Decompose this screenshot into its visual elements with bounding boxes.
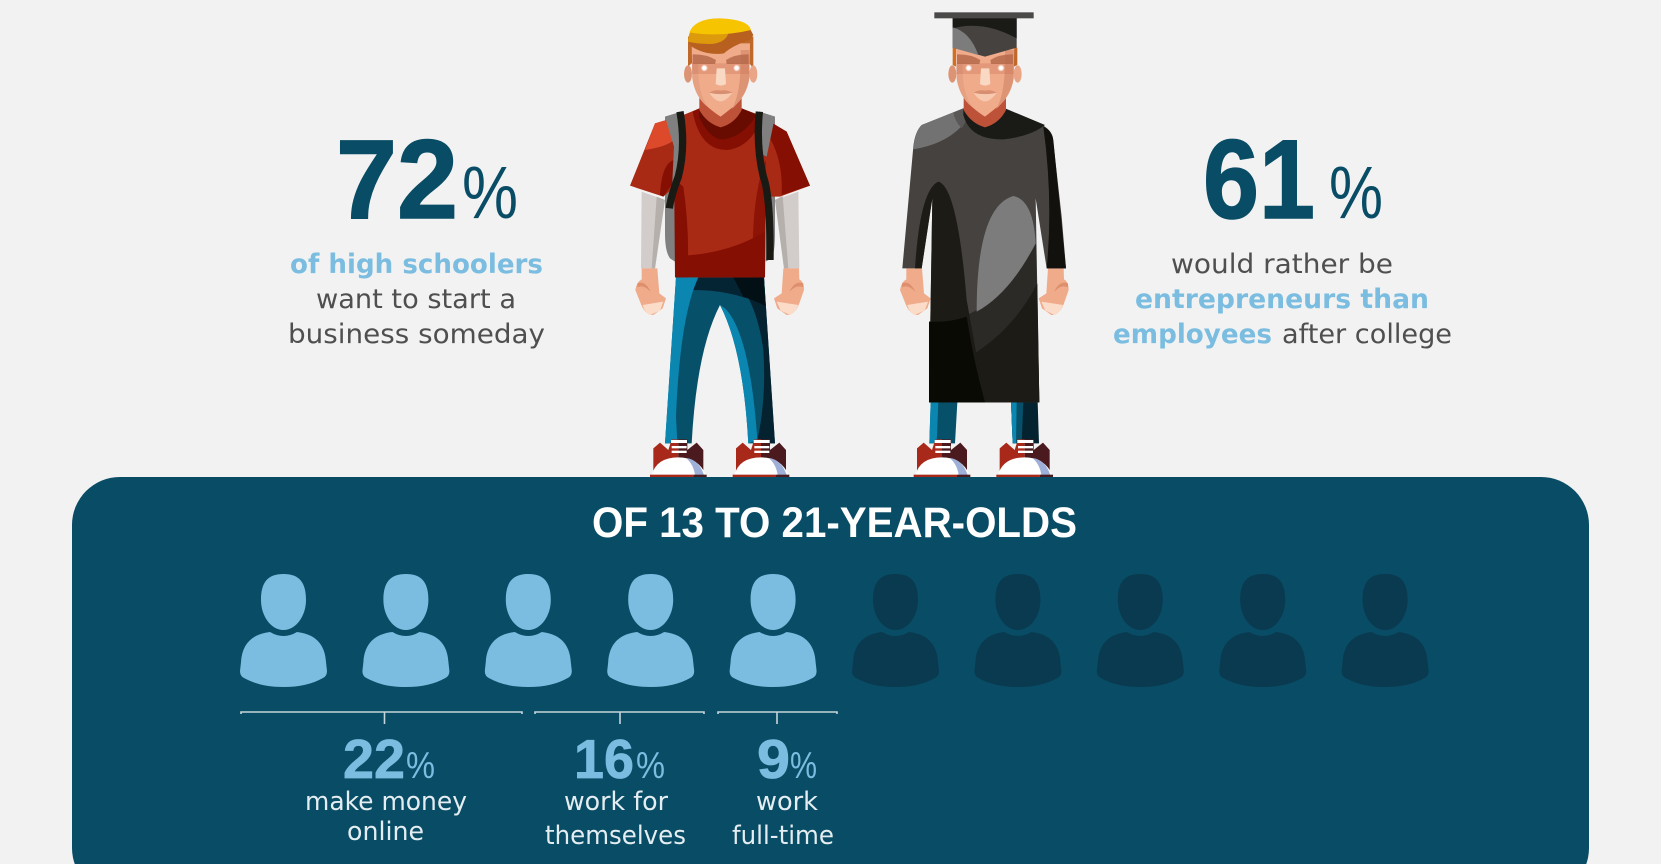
stat: 16 percent work for themselves: work for (564, 787, 668, 817)
panel: of 13 to 21-year-olds (72, 477, 1589, 864)
stat: 72 percent of high schoolers: business someday (288, 319, 545, 350)
icon row: ten people, five highlighted (240, 574, 1429, 687)
figure: high school student with backpack (630, 18, 810, 477)
bracket: 22 percent (241, 712, 522, 724)
stat: 9 percent work full-time (732, 728, 834, 851)
stat: 22 percent make money online: % (406, 745, 435, 786)
stat: 72 percent of high schoolers: of high schoolers (290, 249, 543, 280)
stat: 16 percent work for themselves: 16 (574, 728, 634, 790)
stat: 22 percent make money online: make money (305, 787, 467, 817)
stat: 61 percent would rather be entrepreneurs: would rather be (1171, 249, 1393, 280)
stat: 72 percent of high schoolers: 72 (336, 117, 458, 242)
stat: 61 percent would rather be entrepreneurs: entrepreneurs than (1135, 284, 1429, 315)
stat: 61 percent would rather be entrepreneurs: 61 (1203, 117, 1315, 242)
stat: 22 percent make money online: 22 (343, 728, 405, 790)
stat: 9 percent work full-time: % (790, 745, 817, 786)
heading: OF 13 TO 21-YEAR-OLDS (592, 499, 1077, 547)
stat: 61 percent would rather be entrepreneurs: employees (1113, 319, 1272, 350)
stat: 9 percent work full-time: work (756, 787, 818, 817)
stat: 16 percent work for themselves: themselves (545, 821, 686, 851)
figure: graduate in cap and gown (900, 12, 1069, 477)
stat: 72 percent of high schoolers (288, 117, 545, 350)
bracket: 9 percent (718, 712, 837, 724)
stat: 22 percent make money online: online (347, 817, 424, 847)
stat: 22 percent make money online (305, 728, 467, 847)
stat: 61 percent would rather be entrepreneurs: % (1329, 151, 1383, 234)
stat: 16 percent work for themselves: % (636, 745, 665, 786)
stat: 61 percent would rather be entrepreneurs (1113, 117, 1452, 350)
stat: 72 percent of high schoolers: % (462, 151, 518, 234)
stat: 9 percent work full-time: full-time (732, 821, 834, 851)
stat: 72 percent of high schoolers: want to start a (316, 284, 516, 315)
stat: 16 percent work for themselves (545, 728, 686, 851)
stat: 61 percent would rather be entrepreneurs: after college (1282, 319, 1452, 350)
bracket: 16 percent (535, 712, 704, 724)
stat: 9 percent work full-time: 9 (757, 728, 790, 790)
